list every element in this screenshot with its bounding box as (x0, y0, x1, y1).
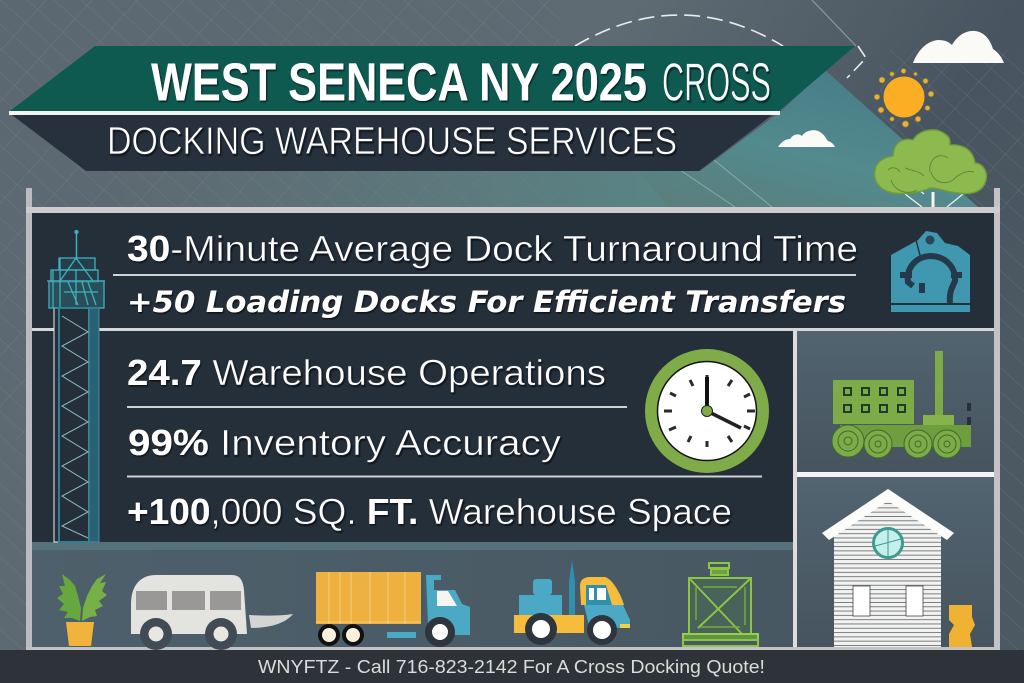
footer bar (0, 650, 1024, 683)
stat: 100,000 sq ft: +100,000 SQ. FT. Warehouse Space (127, 491, 732, 532)
stat: 99% accuracy: 99% Inventory Accuracy (128, 422, 561, 463)
icon: dock tag (891, 231, 970, 312)
icon: clock (645, 349, 769, 473)
icon: white bus (131, 575, 293, 650)
stat: 30-minute turnaround: 30-Minute Average Dock Turnaround Time (127, 228, 858, 269)
footer text: WNYFTZ - Call 716-823-2142 For A Cross Docking Quote! (258, 657, 765, 677)
title banner (9, 46, 855, 171)
icon: control tower (47, 230, 105, 542)
icon: large cloud (913, 31, 1004, 63)
panel: house room (797, 477, 994, 647)
panel: factory room (797, 331, 994, 472)
icon: sun (874, 68, 934, 127)
icon: green crate (683, 563, 758, 646)
icon: tree (875, 130, 986, 207)
panel: floor strip (32, 542, 793, 647)
icon: flatbed yellow truck (514, 560, 630, 645)
stat: 24.7 operations: 24.7 Warehouse Operations (127, 352, 606, 393)
stat: 50 loading docks: +50 Loading Docks For Efficient Transfers (127, 285, 846, 319)
title line 2: DOCKING WAREHOUSE SERVICES (107, 120, 677, 163)
panel: dock stats (32, 213, 994, 328)
icon: yellow post (949, 605, 975, 647)
dashed flight arc (575, 15, 866, 78)
icon: box truck (316, 572, 470, 647)
icon: potted plant (57, 574, 107, 646)
warehouse frame (26, 188, 1000, 650)
dark banner (12, 115, 772, 171)
green banner (10, 46, 855, 111)
icon: green factory machine (832, 351, 971, 458)
panel: operations stats (32, 331, 793, 542)
title line 1: WEST SENECA NY 2025 (151, 52, 647, 112)
icon: small cloud (778, 130, 835, 147)
title line 1: CROSS (662, 52, 771, 112)
icon: white house (822, 489, 954, 647)
